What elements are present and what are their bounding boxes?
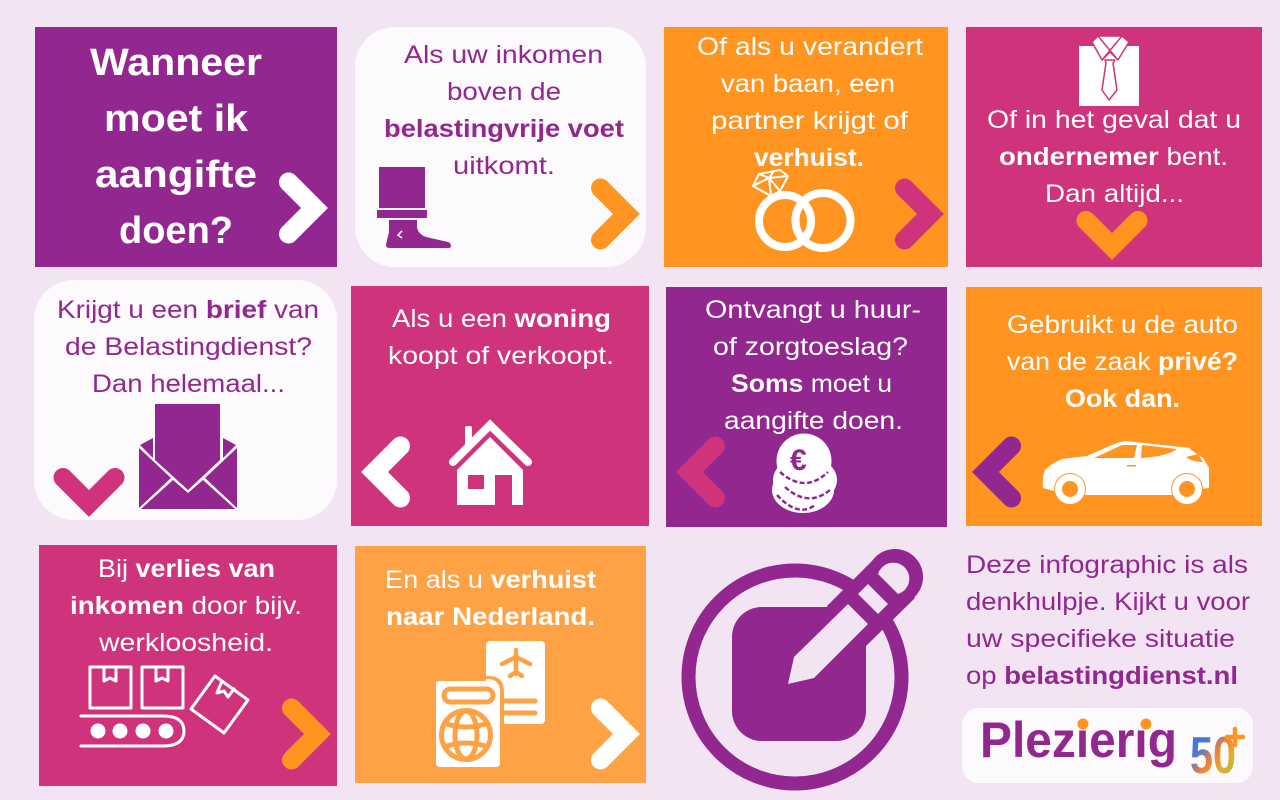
- text: brief: Dan helemaal...: [92, 370, 285, 398]
- panel: auto: [966, 287, 1262, 526]
- text: disclaimer: op belastingdienst.nl: [966, 662, 1238, 690]
- icon: wedding rings: [753, 170, 850, 248]
- title: doen?: [119, 210, 233, 252]
- text: ondernemer: [987, 106, 1241, 208]
- text: Nederland: En als u verhuist: [385, 566, 597, 594]
- text: baan: verhuist.: [754, 144, 864, 172]
- text: baan: van baan, een: [721, 70, 895, 98]
- logo: Plezierig 50+: Plezierig: [980, 712, 1177, 768]
- panel: verhuizen naar Nederland: [355, 546, 646, 783]
- text: disclaimer: [966, 551, 1250, 690]
- text: inkomen: [384, 41, 625, 180]
- panel: brief: [34, 280, 337, 520]
- text: ondernemer: Of in het geval dat u: [987, 106, 1241, 134]
- arrow: right: [904, 188, 930, 240]
- arrow: left: [986, 446, 1012, 498]
- icon: conveyor belt: [81, 667, 248, 746]
- icon: passport and ticket: [436, 641, 545, 770]
- text: inkomen: Als uw inkomen: [404, 41, 603, 69]
- logo: Plezierig 50+: 50: [1190, 727, 1236, 785]
- text: verlies: Bij verlies van: [98, 555, 275, 583]
- text: woning: Als u een woning: [392, 305, 611, 333]
- logo: Plezierig 50+: [962, 708, 1253, 785]
- text: disclaimer: Deze infographic is als: [966, 551, 1248, 579]
- icon: envelope: [139, 404, 237, 509]
- arrow: left: [690, 446, 716, 498]
- text: toeslag: aangifte doen.: [724, 407, 903, 435]
- text: auto: Gebruikt u de auto: [1007, 311, 1238, 339]
- text: baan: [697, 33, 923, 172]
- text: auto: van de zaak privé?: [1007, 348, 1238, 376]
- text: auto: Ook dan.: [1065, 385, 1180, 413]
- arrow: down: [63, 478, 115, 504]
- text: inkomen: belastingvrije voet: [384, 115, 625, 143]
- text: toeslag: of zorgtoeslag?: [713, 333, 908, 361]
- text: brief: de Belastingdienst?: [65, 333, 312, 361]
- icon: pencil and notepad: [688, 549, 923, 784]
- text: toeslag: Ontvangt u huur-: [705, 296, 921, 324]
- icon: euro coins: [772, 434, 837, 513]
- text: inkomen: boven de: [447, 78, 561, 106]
- text: inkomen: uitkomt.: [453, 152, 555, 180]
- panel: baan: [664, 27, 948, 267]
- panel: verlies van inkomen: [39, 545, 337, 786]
- title: aangifte: [95, 154, 257, 196]
- icon: foot: [377, 167, 451, 248]
- arrow: right: [292, 708, 318, 760]
- text: toeslag: [705, 296, 921, 435]
- text: baan: Of als u verandert: [697, 33, 923, 61]
- text: toeslag: Soms moet u: [731, 370, 892, 398]
- text: ondernemer: ondernemer bent.: [999, 143, 1228, 171]
- text: disclaimer: denkhulpje. Kijkt u voor: [966, 588, 1250, 616]
- text: ondernemer: Dan altijd...: [1045, 180, 1184, 208]
- text: auto: [1007, 311, 1238, 413]
- icon: shirt and tie: [1079, 36, 1139, 106]
- text: verlies: [70, 555, 302, 657]
- icon: car: [1043, 441, 1209, 505]
- title: Wanneer: [90, 42, 262, 84]
- text: Nederland: naar Nederland.: [386, 603, 595, 631]
- panel: toeslag: [666, 287, 947, 527]
- title: [90, 42, 262, 252]
- title: moet ik: [104, 98, 249, 140]
- text: brief: Krijgt u een brief van: [57, 296, 319, 324]
- text: baan: partner krijgt of: [711, 107, 908, 135]
- arrow: down: [1086, 220, 1138, 246]
- panel: title: [35, 27, 337, 267]
- arrow: right: [600, 188, 626, 240]
- panel: inkomen: [355, 27, 646, 267]
- panel: ondernemer: [966, 27, 1262, 267]
- panel: woning: [351, 286, 649, 526]
- text: woning: [388, 305, 614, 370]
- text: brief: [57, 296, 319, 398]
- text: verlies: werkloosheid.: [98, 629, 273, 657]
- text: Nederland: [385, 566, 597, 631]
- icon: house: [453, 425, 528, 505]
- text: verlies: inkomen door bijv.: [70, 592, 302, 620]
- text: disclaimer: uw specifieke situatie: [966, 625, 1235, 653]
- icon: euro coins: €: [790, 444, 807, 477]
- text: woning: koopt of verkoopt.: [388, 342, 614, 370]
- arrow: left: [374, 446, 400, 498]
- arrow: right: [600, 708, 626, 760]
- arrow: right: [288, 182, 314, 234]
